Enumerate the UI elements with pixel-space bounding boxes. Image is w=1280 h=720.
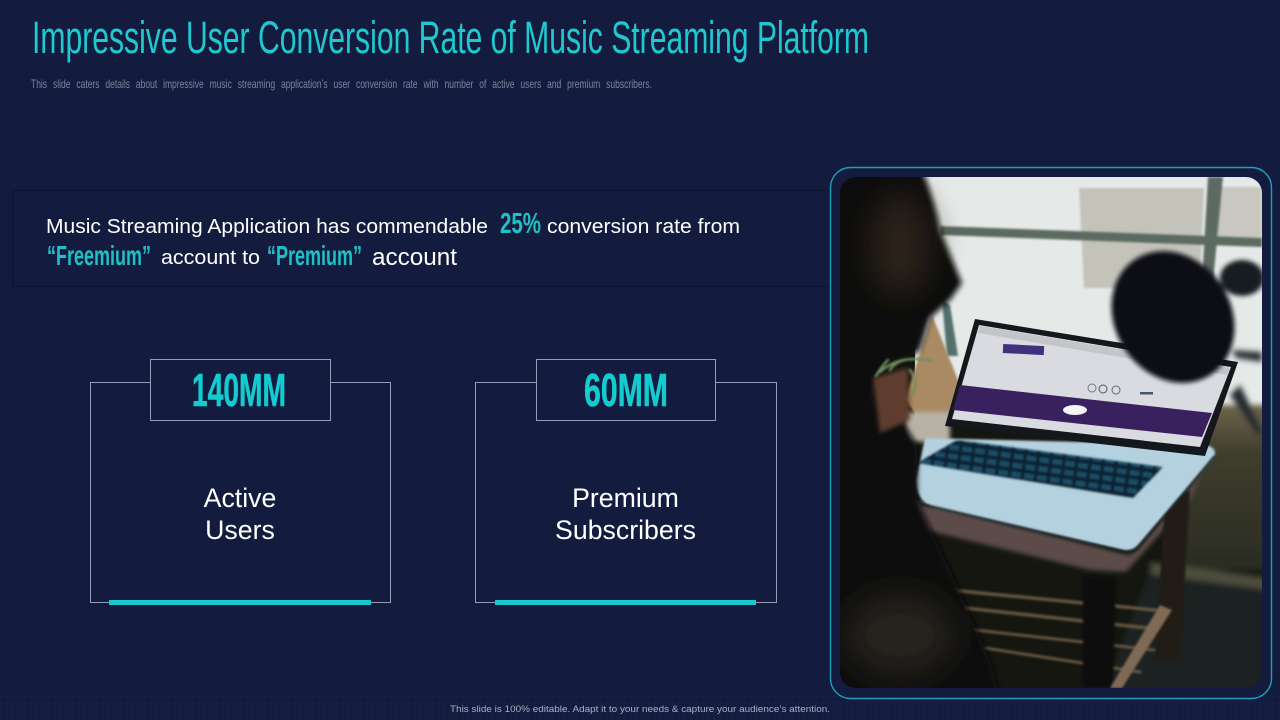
laptop base [916, 438, 1215, 550]
callout line one [46, 208, 740, 240]
card: premium subscribers [476, 360, 776, 605]
callout line two: account to [161, 247, 260, 269]
label: premium subscribers: Subscribers [555, 515, 696, 545]
badge: 140MM: 140MM [192, 364, 286, 416]
callout line one: Music Streaming Application has commendable [46, 216, 488, 238]
badge: 60MM [536, 360, 716, 420]
subtitle: This slide caters details about impressive music streaming application’s user conversion rate with number of active users and premium subscribers. [31, 77, 652, 91]
label: premium subscribers: Premium [572, 483, 679, 513]
badge: 140MM [150, 360, 330, 420]
label: active users: Active [204, 483, 276, 513]
accent bar [495, 600, 756, 605]
callout line two [47, 240, 457, 271]
callout line two: account [372, 244, 457, 271]
microphone pop filter [1108, 248, 1262, 387]
footer note: This slide is 100% editable. Adapt it to your needs & capture your audience’s attention. [450, 704, 830, 715]
photo: person at laptop with microphone [830, 170, 1270, 700]
label: active users: Users [205, 515, 275, 545]
table top [917, 465, 1205, 572]
callout line two: “Freemium” [47, 240, 151, 271]
wooden table edge [905, 315, 960, 425]
table shelf [950, 590, 1175, 672]
window and wall [840, 177, 1262, 688]
table legs [1083, 490, 1190, 688]
laptop screen [945, 319, 1238, 456]
laptop keyboard [917, 440, 1163, 498]
card: active users [90, 360, 390, 605]
callout line two: “Premium” [267, 240, 362, 271]
callout: conversion rate statement [12, 190, 830, 286]
callout line one: conversion rate from [547, 216, 740, 238]
far wall and floor [1113, 346, 1262, 688]
badge: 60MM: 60MM [584, 364, 668, 416]
person silhouette [840, 177, 998, 688]
photo frame [830, 168, 1272, 698]
callout line one: 25% [500, 208, 541, 240]
title: Impressive User Conversion Rate of Music Streaming Platform [32, 12, 869, 63]
accent bar [109, 600, 371, 605]
plant in pot [873, 359, 932, 433]
